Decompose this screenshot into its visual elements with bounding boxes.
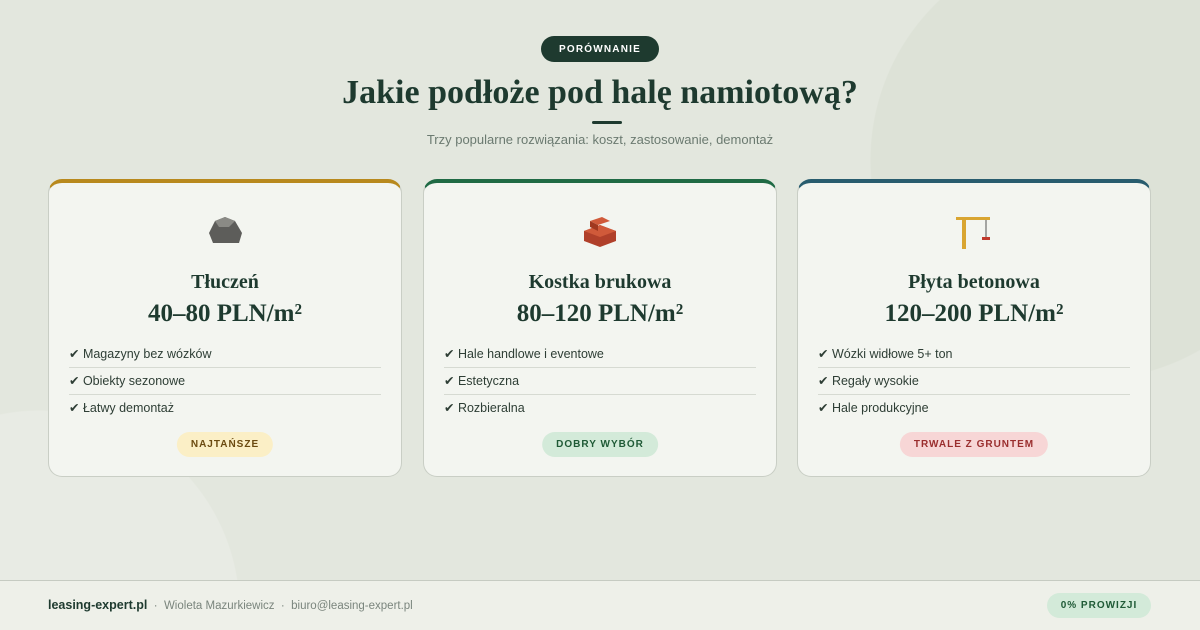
tag: NAJTAŃSZE	[191, 439, 259, 450]
list: ✔ Magazyny bez wózków	[69, 347, 211, 361]
tag	[900, 432, 1048, 457]
panel: płyta betonowa	[797, 179, 1151, 477]
tag: DOBRY WYBÓR	[556, 439, 644, 450]
footer contacts: leasing-expert.pl · Wioleta Mazurkiewicz · biuro@leasing-expert.pl	[48, 598, 413, 612]
badge: porównanie: PORÓWNANIE	[559, 44, 641, 54]
list	[69, 347, 381, 415]
list: ✔ Hale handlowe i eventowe	[444, 347, 604, 361]
tag: TRWALE Z GRUNTEM	[914, 439, 1034, 450]
title: Jakie podłoże pod halę namiotową?	[342, 74, 858, 111]
price: 80–120 PLN/m²	[517, 300, 683, 327]
name: Płyta betonowa	[908, 271, 1040, 293]
badge: porównanie	[541, 36, 659, 62]
tag	[542, 432, 658, 457]
list	[444, 347, 756, 415]
subtitle: Trzy popularne rozwiązania: koszt, zastosowanie, demontaż	[427, 132, 773, 147]
list: ✔ Obiekty sezonowe	[69, 374, 185, 388]
tag	[177, 432, 273, 457]
footer badge	[1047, 593, 1151, 618]
icon: bricks	[584, 217, 616, 247]
price: 120–200 PLN/m²	[884, 300, 1064, 327]
panel: kostka brukowa	[423, 179, 777, 477]
footer	[0, 580, 1200, 630]
icon: crane	[956, 217, 990, 249]
price: 40–80 PLN/m²	[148, 300, 302, 327]
panel: tłuczeń	[48, 179, 402, 477]
list: ✔ Rozbieralna	[444, 401, 525, 415]
list: ✔ Hale produkcyjne	[818, 401, 929, 415]
name: Tłuczeń	[191, 271, 259, 293]
list: ✔ Estetyczna	[444, 374, 519, 388]
footer badge: 0% PROWIZJI	[1061, 600, 1137, 611]
name: Kostka brukowa	[529, 271, 671, 293]
list: ✔ Regały wysokie	[818, 374, 919, 388]
list: ✔ Łatwy demontaż	[69, 401, 174, 415]
list: ✔ Wózki widłowe 5+ ton	[818, 347, 952, 361]
icon: rock	[209, 217, 242, 243]
list	[818, 347, 1130, 415]
